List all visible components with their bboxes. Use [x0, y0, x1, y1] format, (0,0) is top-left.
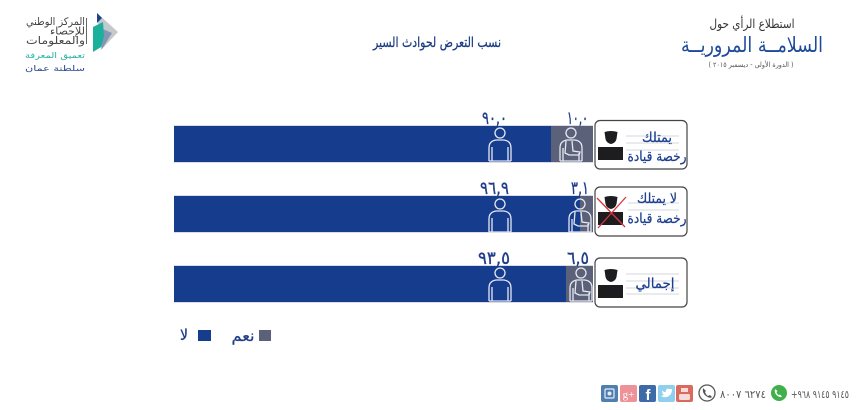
row: total [174, 248, 687, 307]
label card [595, 187, 687, 236]
value: no: ٩٠,٠ [482, 108, 507, 129]
logo [25, 13, 118, 73]
bar: no share [174, 126, 552, 162]
label text: has: يمتلك [642, 130, 672, 146]
logo text: organisation name [26, 16, 85, 47]
icon: person injured [569, 199, 591, 232]
label card [595, 120, 687, 169]
bar: no share [174, 266, 567, 302]
icon: facebook [639, 385, 656, 404]
title: edition: ( الدورة الأولى - ديسمبر ٢٠١٥ ) [708, 60, 794, 69]
legend [180, 326, 271, 345]
icon: driver [598, 131, 623, 160]
logo text: organisation name: والمعلومات [26, 35, 85, 47]
label text: total: إجمالي [636, 276, 675, 292]
icon: google plus: g+ [623, 389, 634, 401]
icon: logo mark [93, 13, 118, 52]
icon: person uninjured [489, 128, 511, 161]
bar track [174, 125, 593, 163]
legend label: no: لا [180, 326, 188, 344]
title: road safety: السلامــة المروريــة [681, 33, 823, 57]
icon: twitter [658, 385, 675, 402]
bar: no share [174, 196, 581, 232]
value: no: ٩٣,٥ [478, 248, 510, 269]
icon: facebook: f [646, 387, 652, 404]
label text: licence: رخصة قيادة [628, 149, 686, 165]
icon: crossed driver [597, 196, 626, 228]
icon: person uninjured [489, 199, 511, 232]
logo text: slogan: تعميق المعرفة [25, 51, 85, 60]
icon: phone [699, 385, 715, 401]
icon: person injured [570, 268, 592, 301]
value: yes: ٦,٥ [567, 248, 589, 269]
heading: chart title: نسب التعرض لحوادث السير [372, 35, 501, 51]
icon: whatsapp [771, 385, 787, 401]
bar: yes share [580, 196, 593, 232]
bar: yes share [566, 266, 593, 302]
icon: instagram [601, 385, 618, 402]
icon: person injured [560, 128, 582, 161]
logo text: country: سلطنة عمان [25, 64, 85, 73]
text: toll-free number: ٨٠٠٧ ٦٢٧٤ [720, 388, 766, 401]
title: survey line: استطلاع الرأي حول [710, 15, 794, 32]
logo text: organisation name: المركز الوطني [26, 16, 85, 28]
value: yes: ٣,١ [571, 178, 589, 199]
legend label: yes: نعم [232, 327, 254, 345]
icon: youtube [676, 385, 693, 402]
icon: person [598, 269, 623, 298]
row: has licence [174, 108, 687, 169]
bar track [174, 265, 593, 303]
title block [681, 15, 823, 69]
row: no licence [174, 178, 687, 236]
value: no: ٩٦,٩ [480, 178, 509, 199]
label card [595, 258, 687, 307]
footer contacts [601, 385, 849, 404]
bar track [174, 195, 593, 233]
legend swatch: yes [259, 330, 271, 341]
value: yes: ١٠,٠ [567, 108, 588, 129]
icon: google plus [620, 385, 637, 402]
logo text: organisation name: للإحصاء [50, 26, 85, 38]
logo divider [86, 18, 87, 44]
legend swatch: no [198, 330, 211, 341]
bar: yes share [551, 126, 593, 162]
label text: licence: رخصة قيادة [628, 211, 686, 227]
label text: does not have: لا يمتلك [637, 191, 677, 207]
icon: person uninjured [489, 268, 511, 301]
